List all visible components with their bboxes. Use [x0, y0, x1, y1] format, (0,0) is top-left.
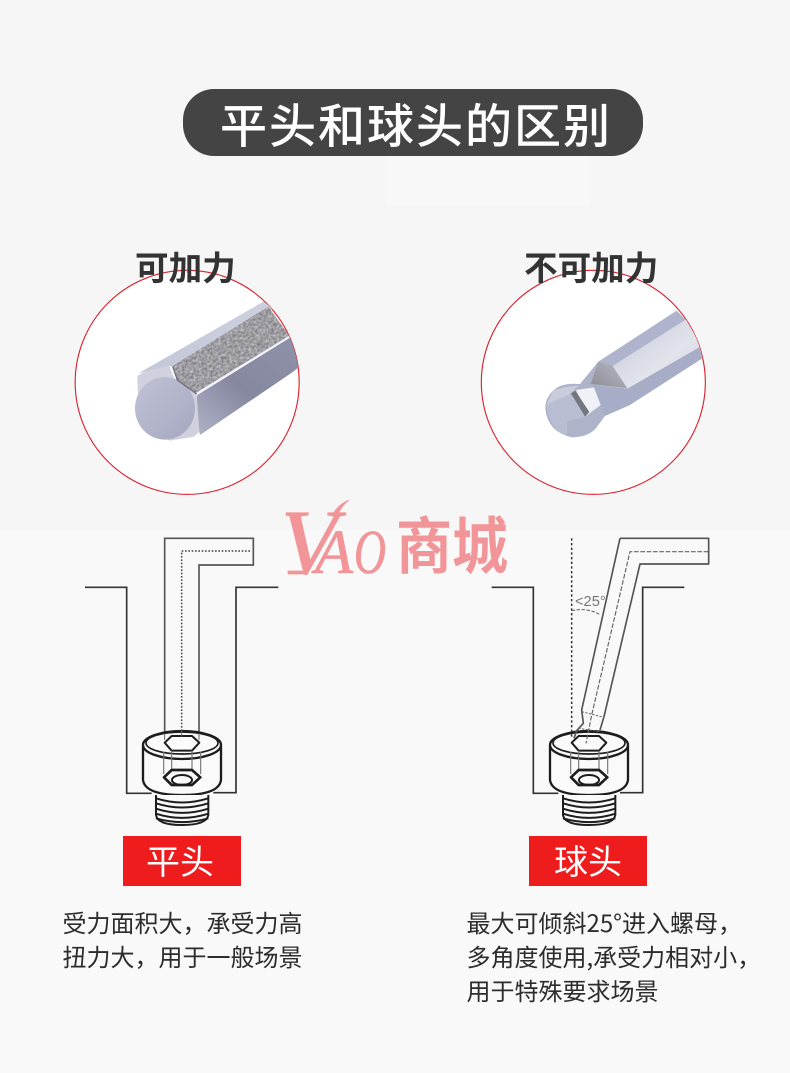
text: flat head description — [62, 904, 302, 973]
badge: flat head — [123, 836, 241, 886]
badge: ball head: 球头 — [554, 844, 622, 882]
icon: flat head hex key — [135, 302, 303, 441]
text: flat head description: 扭力大，用于一般场景 — [62, 938, 302, 973]
title: 平头和球头的区别 — [220, 100, 612, 153]
label: tilt angle: <25° — [575, 594, 606, 610]
badge: flat head: 平头 — [146, 844, 214, 882]
diagram: ball head tilted in socket — [492, 538, 709, 825]
panel: flat head photo — [75, 270, 303, 494]
label: can apply force: 可加力 — [135, 250, 236, 288]
watermark: A — [311, 519, 354, 587]
text: ball head description: 多角度使用,承受力相对小， — [466, 938, 761, 973]
watermark — [281, 491, 508, 593]
text: ball head description — [466, 904, 761, 1007]
text: ball head description: 用于特殊要求场景 — [466, 972, 658, 1007]
diagram: flat head in socket — [85, 538, 278, 825]
badge: ball head — [529, 836, 647, 886]
watermark: V — [281, 491, 347, 593]
title — [183, 89, 643, 156]
watermark: O — [354, 519, 386, 587]
text: flat head description: 受力面积大，承受力高 — [62, 904, 302, 939]
icon: ball head hex key — [545, 311, 705, 437]
label: cannot apply force: 不可加力 — [524, 250, 658, 288]
text: ball head description: 最大可倾斜25°进入螺母， — [466, 904, 742, 939]
panel: ball head photo — [481, 270, 705, 494]
watermark: 商城 — [396, 514, 508, 582]
